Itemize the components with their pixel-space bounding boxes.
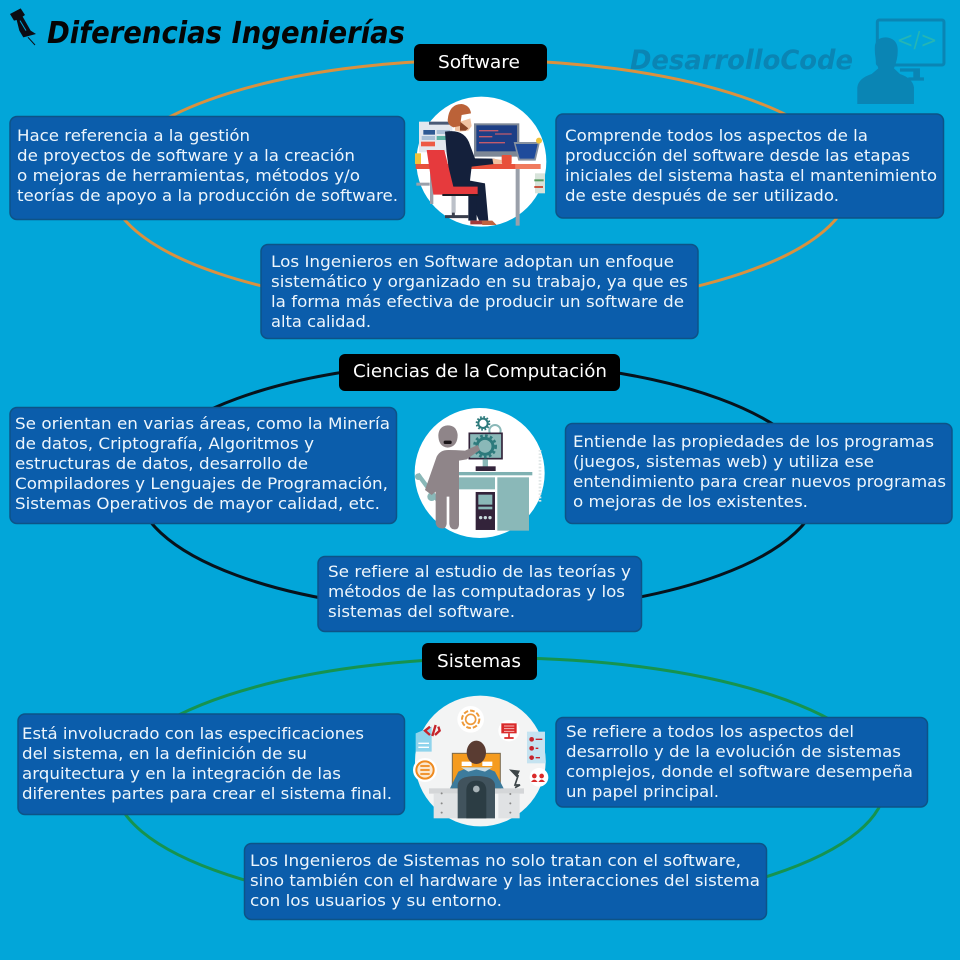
black ellipse bbox=[137, 362, 819, 612]
icon: technician with gears bbox=[415, 408, 545, 538]
label: Ciencias de la Computación bbox=[339, 354, 620, 391]
box: enfoque: alta calidad. bbox=[271, 312, 371, 331]
label: Software: Software bbox=[438, 52, 520, 73]
panel: Ciencias de la Computación bbox=[10, 354, 952, 632]
box: estudio: Se refiere al estudio de las teorías y bbox=[328, 562, 631, 581]
box: estudio bbox=[318, 556, 642, 632]
box: áreas: Se orientan en varias áreas, como la Minería bbox=[15, 414, 390, 433]
box: especificaciones: diferentes partes para crear el sistema final. bbox=[22, 784, 392, 803]
icon: pushpin bbox=[10, 8, 36, 45]
box: gestión: o mejoras de herramientas, métodos y/o bbox=[17, 166, 360, 185]
box: evolución bbox=[556, 718, 928, 807]
box: propiedades: o mejoras de los existentes. bbox=[573, 492, 808, 511]
box: especificaciones: del sistema, en la definición de su bbox=[22, 744, 307, 763]
box: áreas: de datos, Criptografía, Algoritmos y bbox=[15, 434, 314, 453]
label: Ciencias de la Computación: Ciencias de la Computación bbox=[353, 361, 607, 382]
box: producción: producción del software desde las etapas bbox=[565, 146, 910, 165]
box: enfoque: sistemático y organizado en su trabajo, ya que es bbox=[271, 272, 688, 291]
box: producción bbox=[556, 114, 944, 218]
box: especificaciones: Está involucrado con las especificaciones bbox=[22, 724, 364, 743]
box: hardware bbox=[244, 844, 766, 920]
box: gestión: teorías de apoyo a la producción de software. bbox=[17, 186, 398, 205]
box: propiedades: Entiende las propiedades de los programas bbox=[573, 432, 934, 451]
box: enfoque bbox=[261, 244, 698, 338]
icon: developer at monitor: </> bbox=[897, 29, 937, 54]
box: producción: de este después de ser utilizado. bbox=[565, 186, 839, 205]
panel: Software bbox=[10, 44, 944, 338]
box: hardware: Los Ingenieros de Sistemas no solo tratan con el software, bbox=[250, 851, 741, 870]
orange ellipse bbox=[110, 60, 850, 310]
box: hardware: sino también con el hardware y las interacciones del sistema bbox=[250, 871, 760, 890]
icon: engineer at computer bbox=[413, 696, 548, 826]
box: especificaciones: arquitectura y en la integración de las bbox=[22, 764, 341, 783]
box: gestión bbox=[10, 116, 404, 220]
box: evolución: Se refiere a todos los aspectos del bbox=[566, 722, 854, 741]
box: gestión: de proyectos de software y a la creación bbox=[17, 146, 355, 165]
box: propiedades: (juegos, sistemas web) y utiliza ese bbox=[573, 452, 874, 471]
icon: developer at monitor bbox=[857, 20, 944, 104]
label: Sistemas: Sistemas bbox=[437, 651, 521, 672]
title: Diferencias Ingenierías bbox=[47, 16, 405, 51]
box: evolución: complejos, donde el software desempeña bbox=[566, 762, 913, 781]
box: enfoque: la forma más efectiva de producir un software de bbox=[271, 292, 684, 311]
box: evolución: un papel principal. bbox=[566, 782, 719, 801]
box: áreas: Sistemas Operativos de mayor calidad, etc. bbox=[15, 494, 380, 513]
box: hardware: con los usuarios y su entorno. bbox=[250, 891, 502, 910]
box: especificaciones bbox=[18, 714, 404, 814]
green ellipse bbox=[115, 658, 885, 912]
label: Sistemas bbox=[422, 643, 537, 680]
box: estudio: métodos de las computadoras y los bbox=[328, 582, 625, 601]
box: enfoque: Los Ingenieros en Software adoptan un enfoque bbox=[271, 252, 674, 271]
box: áreas: estructuras de datos, desarrollo de bbox=[15, 454, 308, 473]
box: áreas bbox=[10, 408, 396, 524]
box: propiedades: entendimiento para crear nuevos programas bbox=[573, 472, 946, 491]
box: evolución: desarrollo y de la evolución de sistemas bbox=[566, 742, 901, 761]
box: producción: Comprende todos los aspectos de la bbox=[565, 126, 868, 145]
box: gestión: Hace referencia a la gestión bbox=[17, 126, 250, 145]
icon: programmer at desk bbox=[415, 97, 546, 227]
panel: Sistemas bbox=[18, 643, 928, 920]
box: áreas: Compiladores y Lenguajes de Programación, bbox=[15, 474, 388, 493]
watermark: DesarrolloCode bbox=[630, 20, 944, 104]
box: producción: iniciales del sistema hasta el mantenimiento bbox=[565, 166, 937, 185]
box: estudio: sistemas del software. bbox=[328, 602, 515, 621]
label: Software bbox=[414, 44, 547, 81]
watermark: DesarrolloCode: DesarrolloCode bbox=[630, 45, 853, 76]
box: propiedades bbox=[566, 424, 952, 524]
